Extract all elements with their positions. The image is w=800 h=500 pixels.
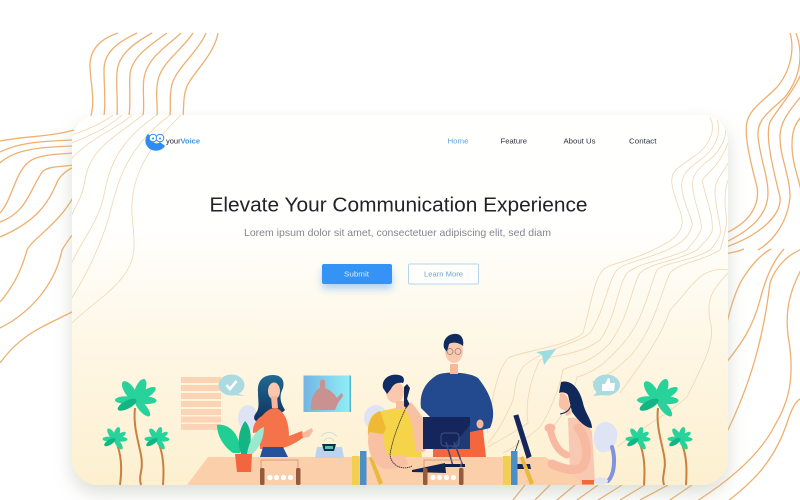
person: standing man (421, 334, 493, 457)
text lines panel (181, 377, 221, 430)
icon: potted plant (217, 421, 264, 472)
background wave lines: right (513, 33, 800, 500)
navigation: About Us (564, 136, 596, 146)
faint wave lines inside card (72, 115, 728, 453)
icon: right palm trees (626, 377, 693, 485)
icon: desktop monitor (412, 417, 470, 473)
button: submit (322, 264, 392, 284)
background wave lines: top left (90, 33, 218, 116)
navigation (448, 136, 656, 146)
icon: phone logo (146, 134, 164, 150)
icon: left palm trees (102, 377, 170, 485)
icon: books left (352, 451, 383, 485)
subtitle: Lorem ipsum dolor sit amet, consectetuer adipiscing elit, sed diam (244, 227, 551, 239)
background wave lines: left (0, 130, 74, 363)
panel: landing page card (72, 115, 728, 485)
button: submit: Submit (344, 270, 370, 278)
icon: router with wifi (315, 432, 344, 458)
navigation: Feature (500, 136, 527, 146)
button: learn more (408, 264, 478, 284)
icon: newton cradle right (423, 460, 464, 485)
person: woman with headset (544, 382, 617, 484)
logo (146, 134, 200, 150)
icon: thumbs-up speech bubble (593, 374, 620, 396)
navigation: Home (448, 136, 468, 146)
button: learn more: Learn More (424, 270, 463, 278)
icon: paper plane (536, 349, 556, 365)
icon: books right with side monitor (503, 415, 534, 485)
person: woman at left (238, 375, 313, 457)
person: man on phone (364, 375, 432, 469)
logo wordmark: yourVoice (166, 136, 200, 146)
title: Elevate Your Communication Experience (210, 194, 588, 216)
icon: video call screen (304, 376, 351, 412)
navigation: Contact (629, 136, 656, 146)
icon: newton cradle left (260, 460, 300, 485)
icon: check speech bubble (218, 374, 245, 396)
desk (187, 457, 595, 485)
